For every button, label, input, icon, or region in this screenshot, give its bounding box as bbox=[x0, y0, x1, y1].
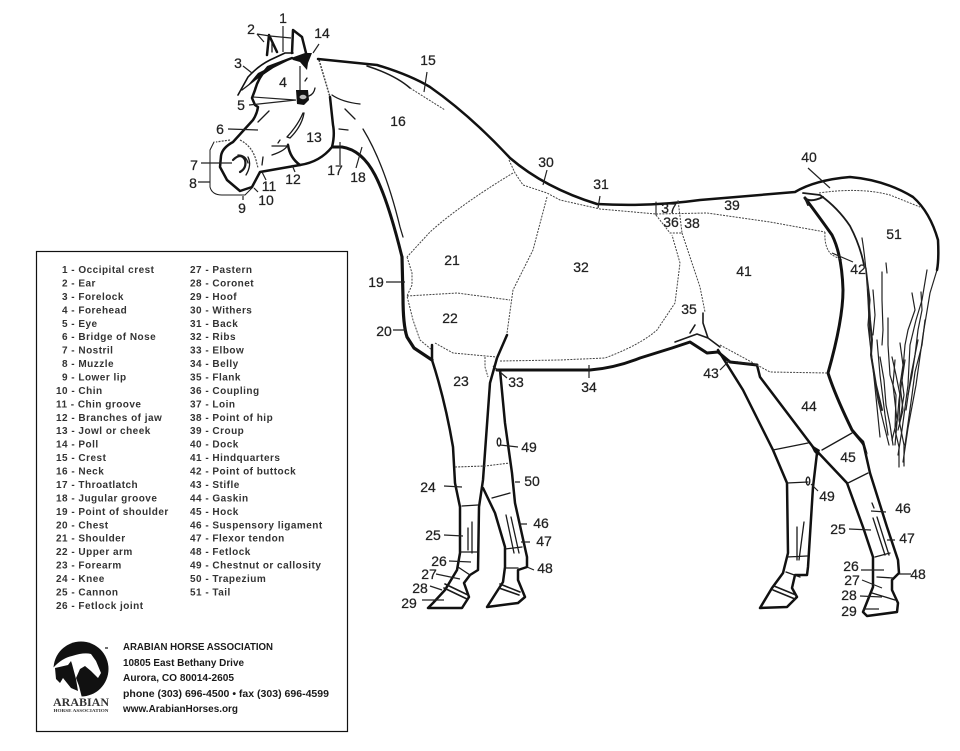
legend: parts 1 to 26: 5 - Eye bbox=[62, 319, 98, 330]
numbered part labels: 50 bbox=[524, 473, 540, 489]
numbered part labels: 16 bbox=[390, 113, 406, 129]
numbered part labels: 33 bbox=[508, 374, 524, 390]
numbered part labels: 14 bbox=[314, 25, 330, 41]
numbered part labels: 29 bbox=[401, 595, 417, 611]
leader lines bbox=[198, 26, 911, 609]
numbered part labels: 38 bbox=[684, 215, 700, 231]
legend: parts 1 to 26: 1 - Occipital crest bbox=[62, 265, 155, 276]
numbered part labels: 25 bbox=[425, 527, 441, 543]
tail hair bbox=[862, 238, 937, 467]
legend: parts 1 to 26: 19 - Point of shoulder bbox=[56, 507, 169, 518]
numbered part labels: 47 bbox=[536, 533, 552, 549]
hind legs outline bbox=[718, 350, 899, 616]
legend: parts 1 to 26: 16 - Neck bbox=[56, 467, 104, 478]
legend: parts 27 to 51: 51 - Tail bbox=[190, 588, 231, 598]
numbered part labels: 48 bbox=[537, 560, 553, 576]
numbered part labels: 35 bbox=[681, 301, 697, 317]
association address: phone (303) 696-4500 • fax (303) 696-4599 bbox=[123, 689, 329, 700]
legend: parts 27 to 51: 30 - Withers bbox=[190, 305, 252, 316]
numbered part labels: 45 bbox=[840, 449, 856, 465]
numbered part labels: 22 bbox=[442, 310, 458, 326]
front legs outline bbox=[428, 335, 527, 608]
numbered part labels: 3 bbox=[234, 55, 242, 71]
legend: parts 27 to 51: 34 - Belly bbox=[190, 359, 239, 370]
legend: parts 1 to 26: 23 - Forearm bbox=[56, 561, 122, 572]
numbered part labels: 27 bbox=[421, 566, 437, 582]
legend: parts 1 to 26: 21 - Shoulder bbox=[56, 534, 126, 545]
numbered part labels: 21 bbox=[444, 252, 460, 268]
legend: parts 1 to 26 bbox=[56, 265, 169, 612]
numbered part labels bbox=[189, 10, 926, 619]
legend: parts 1 to 26: 3 - Forelock bbox=[62, 292, 124, 303]
numbered part labels: 44 bbox=[801, 398, 817, 414]
legend: parts 27 to 51: 35 - Flank bbox=[190, 372, 241, 384]
legend: parts 1 to 26: 17 - Throatlatch bbox=[56, 480, 138, 491]
legend: parts 27 to 51: 50 - Trapezium bbox=[190, 574, 266, 585]
numbered part labels: 24 bbox=[420, 479, 436, 495]
association address: ARABIAN HORSE ASSOCIATION bbox=[123, 642, 273, 653]
numbered part labels: 15 bbox=[420, 52, 436, 68]
association address bbox=[122, 642, 329, 715]
numbered part labels: 9 bbox=[238, 200, 246, 216]
legend: parts 1 to 26: 26 - Fetlock joint bbox=[56, 601, 144, 612]
numbered part labels: 28 bbox=[841, 587, 857, 603]
numbered part labels: 18 bbox=[350, 169, 366, 185]
numbered part labels: 26 bbox=[431, 553, 447, 569]
legend: parts 27 to 51: 47 - Flexor tendon bbox=[190, 534, 285, 545]
legend: parts 27 to 51: 49 - Chestnut or callosity bbox=[190, 561, 321, 572]
numbered part labels: 31 bbox=[593, 176, 609, 192]
legend: parts 27 to 51: 33 - Elbow bbox=[190, 346, 244, 357]
icon: chestnut, foreleg bbox=[497, 438, 501, 446]
legend: parts 1 to 26: 18 - Jugular groove bbox=[56, 493, 157, 504]
legend: parts 1 to 26: 4 - Forehead bbox=[62, 305, 127, 316]
legend: parts 27 to 51: 46 - Suspensory ligament bbox=[190, 520, 323, 531]
legend: parts 27 to 51: 37 - Loin bbox=[190, 399, 235, 410]
numbered part labels: 25 bbox=[830, 521, 846, 537]
numbered part labels: 28 bbox=[412, 580, 428, 596]
association address: Aurora, CO 80014-2605 bbox=[123, 673, 234, 684]
legend: parts 27 to 51: 41 - Hindquarters bbox=[190, 453, 280, 464]
legend: parts 27 to 51: 42 - Point of buttock bbox=[190, 467, 296, 478]
legend: parts 27 to 51: 48 - Fetlock bbox=[190, 547, 251, 558]
legend: parts 1 to 26: 14 - Poll bbox=[56, 440, 99, 451]
numbered part labels: 17 bbox=[327, 162, 343, 178]
legend: parts 1 to 26: 7 - Nostril bbox=[62, 346, 113, 357]
legend: parts 27 to 51: 38 - Point of hip bbox=[190, 413, 273, 424]
legend: parts 1 to 26: 24 - Knee bbox=[56, 574, 105, 585]
legend: parts 27 to 51: 36 - Coupling bbox=[190, 386, 260, 397]
icon: Arabian Horse Association logo: HORSE ASSOCIATION bbox=[54, 708, 109, 713]
numbered part labels: 11 bbox=[262, 178, 276, 194]
legend: parts 1 to 26: 8 - Muzzle bbox=[62, 359, 114, 370]
numbered part labels: 4 bbox=[279, 74, 287, 90]
legend: parts 1 to 26: 22 - Upper arm bbox=[56, 547, 133, 558]
numbered part labels: 47 bbox=[899, 530, 915, 546]
legend: parts 1 to 26: 25 - Cannon bbox=[56, 588, 119, 598]
numbered part labels: 27 bbox=[844, 572, 860, 588]
numbered part labels: 26 bbox=[843, 558, 859, 574]
legend: parts 27 to 51: 43 - Stifle bbox=[190, 480, 240, 491]
icon: eye bbox=[296, 88, 315, 105]
horse body outline bbox=[318, 59, 938, 442]
numbered part labels: 49 bbox=[819, 488, 835, 504]
numbered part labels: 30 bbox=[538, 154, 554, 170]
numbered part labels: 10 bbox=[258, 192, 274, 208]
icon: chestnut, hindleg bbox=[806, 477, 810, 485]
legend: parts 1 to 26: 20 - Chest bbox=[56, 520, 109, 531]
legend: parts 1 to 26: 10 - Chin bbox=[56, 386, 103, 397]
numbered part labels: 41 bbox=[736, 263, 752, 279]
legend: parts 27 to 51: 44 - Gaskin bbox=[190, 493, 249, 504]
legend: parts 1 to 26: 11 - Chin groove bbox=[56, 399, 141, 410]
legend: parts 27 to 51: 45 - Hock bbox=[190, 507, 239, 518]
legend: parts 1 to 26: 12 - Branches of jaw bbox=[56, 413, 162, 424]
numbered part labels: 40 bbox=[801, 149, 817, 165]
numbered part labels: 37 bbox=[661, 200, 677, 216]
legend: parts 27 to 51 bbox=[190, 265, 323, 598]
numbered part labels: 6 bbox=[216, 121, 224, 137]
numbered part labels: 42 bbox=[850, 261, 866, 277]
numbered part labels: 13 bbox=[306, 129, 322, 145]
panel: legend and association details bbox=[36, 252, 348, 732]
numbered part labels: 1 bbox=[279, 10, 287, 26]
legend: parts 27 to 51: 28 - Coronet bbox=[190, 278, 254, 289]
association address: www.ArabianHorses.org bbox=[122, 704, 238, 715]
numbered part labels: 34 bbox=[581, 379, 597, 395]
numbered part labels: 48 bbox=[910, 566, 926, 582]
numbered part labels: 32 bbox=[573, 259, 589, 275]
numbered part labels: 8 bbox=[189, 175, 197, 191]
icon: Arabian Horse Association logo: ARABIAN bbox=[53, 697, 110, 709]
numbered part labels: 46 bbox=[895, 500, 911, 516]
numbered part labels: 36 bbox=[663, 214, 679, 230]
numbered part labels: 29 bbox=[841, 603, 857, 619]
numbered part labels: 23 bbox=[453, 373, 469, 389]
numbered part labels: 19 bbox=[368, 274, 384, 290]
numbered part labels: 43 bbox=[703, 365, 719, 381]
numbered part labels: 12 bbox=[285, 171, 301, 187]
legend: parts 27 to 51: 27 - Pastern bbox=[190, 265, 252, 276]
legend: parts 1 to 26: 9 - Lower lip bbox=[62, 372, 127, 384]
horse head outline bbox=[210, 30, 403, 237]
icon: Arabian Horse Association logo bbox=[48, 642, 110, 713]
numbered part labels: 2 bbox=[247, 21, 255, 37]
numbered part labels: 49 bbox=[521, 439, 537, 455]
numbered part labels: 51 bbox=[886, 226, 902, 242]
legend: parts 1 to 26: 15 - Crest bbox=[56, 453, 107, 464]
legend: parts 27 to 51: 32 - Ribs bbox=[190, 332, 236, 343]
legend: parts 1 to 26: 6 - Bridge of Nose bbox=[62, 332, 156, 343]
numbered part labels: 46 bbox=[533, 515, 549, 531]
body region dotted boundaries bbox=[407, 160, 920, 377]
numbered part labels: 39 bbox=[724, 197, 740, 213]
numbered part labels: 20 bbox=[376, 323, 392, 339]
legend: parts 27 to 51: 29 - Hoof bbox=[190, 292, 237, 303]
association address: 10805 East Bethany Drive bbox=[123, 658, 244, 669]
legend: parts 1 to 26: 2 - Ear bbox=[62, 278, 96, 289]
legend: parts 27 to 51: 40 - Dock bbox=[190, 440, 239, 451]
legend: parts 27 to 51: 39 - Croup bbox=[190, 426, 244, 437]
numbered part labels: 7 bbox=[190, 157, 198, 173]
legend: parts 1 to 26: 13 - Jowl or cheek bbox=[56, 426, 151, 437]
legend: parts 27 to 51: 31 - Back bbox=[190, 319, 238, 330]
numbered part labels: 5 bbox=[237, 97, 245, 113]
